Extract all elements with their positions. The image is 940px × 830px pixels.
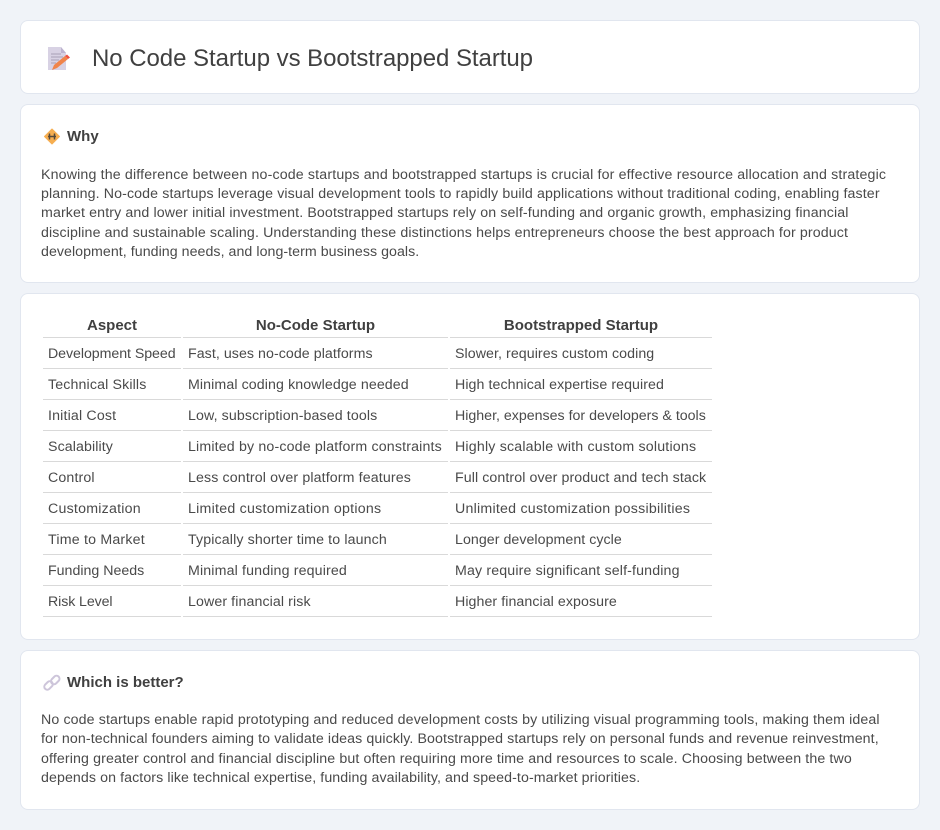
comparison table: [43, 317, 712, 617]
text: Unlimited customization possibilities: [455, 501, 690, 517]
panel: title: [20, 20, 920, 94]
text: Bootstrapped Startup: [504, 317, 658, 334]
text: Higher, expenses for developers & tools: [455, 408, 706, 424]
text: Typically shorter time to launch: [188, 532, 387, 548]
heading: why: Why: [67, 128, 99, 145]
icon: memo and pencil: [48, 47, 70, 70]
text: planning. No-code startups leverage visual development tools to rapidly build applications without traditional coding, enabling faster: [41, 186, 880, 202]
text: Technical Skills: [48, 377, 146, 393]
text: Longer development cycle: [455, 532, 622, 548]
panel: comparison table: [20, 293, 920, 640]
text: Time to Market: [48, 532, 145, 548]
text block: which is better: [41, 712, 880, 786]
panel: why: [20, 104, 920, 283]
text: market entry and lower initial investment. Bootstrapped startups rely on self-funding and organic growth, emphasizing financial: [41, 205, 849, 221]
text: May require significant self-funding: [455, 563, 680, 579]
title: No Code Startup vs Bootstrapped Startup: [92, 45, 533, 72]
text: No code startups enable rapid prototyping and reduced development costs by utilizing visual programming tools, making them ideal: [41, 712, 880, 728]
text: Development Speed: [48, 346, 176, 362]
text: Risk Level: [48, 594, 112, 610]
text: Limited customization options: [188, 501, 381, 517]
text: Knowing the difference between no-code startups and bootstrapped startups is crucial for effective resource allocation and strategic: [41, 167, 886, 183]
text: Low, subscription-based tools: [188, 408, 377, 424]
text: development, funding needs, and long-term business goals.: [41, 244, 419, 260]
text: No-Code Startup: [256, 317, 375, 334]
text: High technical expertise required: [455, 377, 664, 393]
icon: diamond sign: [44, 128, 60, 144]
text: Less control over platform features: [188, 470, 411, 486]
text: Lower financial risk: [188, 594, 311, 610]
text: Aspect: [87, 317, 137, 334]
text: Control: [48, 470, 95, 486]
text: Limited by no-code platform constraints: [188, 439, 442, 455]
text: Scalability: [48, 439, 113, 455]
text: Funding Needs: [48, 563, 144, 579]
text: Minimal funding required: [188, 563, 347, 579]
text: Initial Cost: [48, 408, 116, 424]
text: for non-technical founders aiming to validate ideas quickly. Bootstrapped startups rely on personal funds and revenue reinvestment,: [41, 731, 879, 747]
panel: which is better: [20, 650, 920, 810]
text block: why: [41, 167, 886, 260]
text: offering greater control and financial discipline but often requiring more time and resources to scale. Choosing between the two: [41, 751, 852, 767]
text: Customization: [48, 501, 141, 517]
text: Highly scalable with custom solutions: [455, 439, 696, 455]
text: Minimal coding knowledge needed: [188, 377, 409, 393]
heading: which is better: Which is better?: [67, 674, 184, 691]
text: Full control over product and tech stack: [455, 470, 706, 486]
text: discipline and sustainable scaling. Understanding these distinctions helps entrepreneurs choose the best approach for product: [41, 225, 848, 241]
text: Higher financial exposure: [455, 594, 617, 610]
text: Slower, requires custom coding: [455, 346, 654, 362]
text: depends on factors like technical expertise, funding availability, and speed-to-market priorities.: [41, 770, 640, 786]
text: Fast, uses no-code platforms: [188, 346, 373, 362]
icon: link: [43, 674, 60, 691]
